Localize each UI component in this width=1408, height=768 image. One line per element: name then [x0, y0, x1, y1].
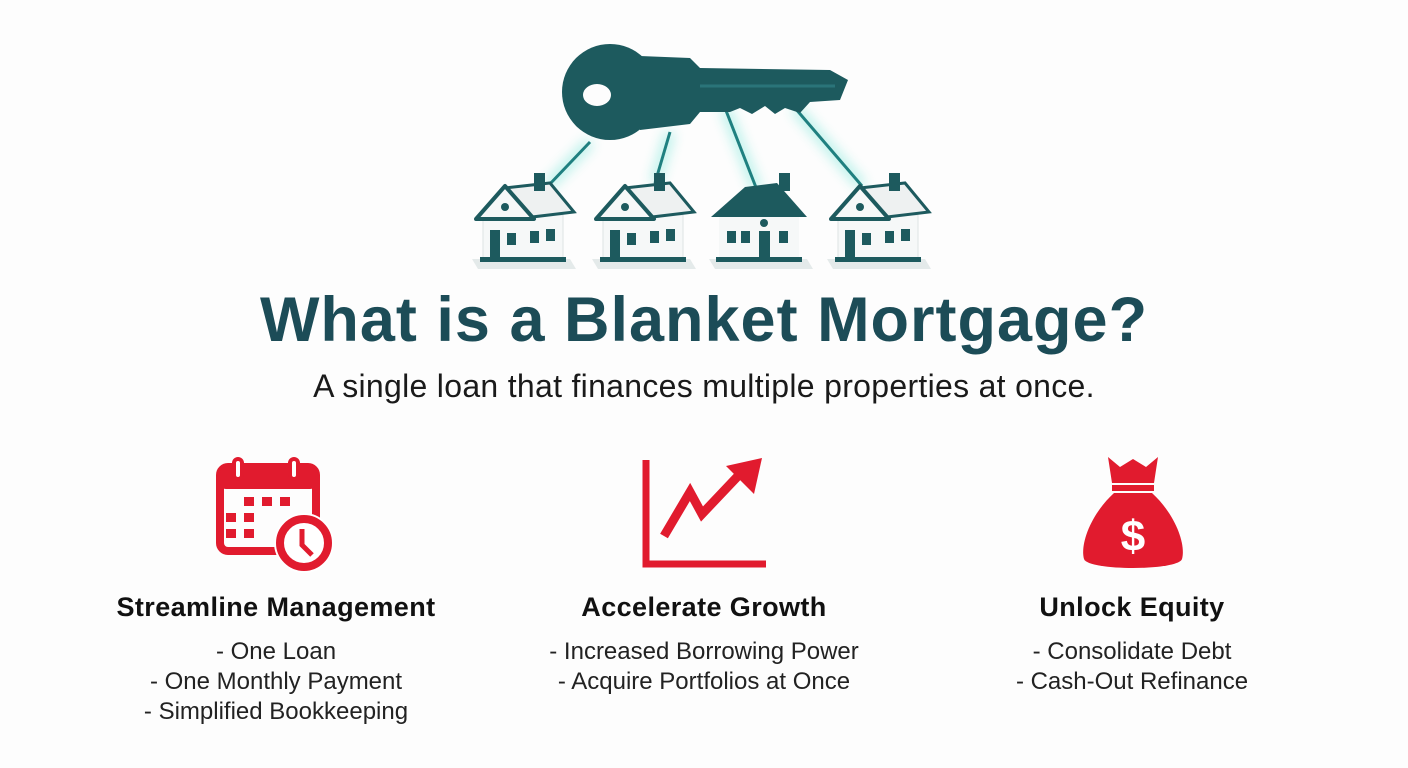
column: streamline management: - One Loan: [216, 638, 336, 665]
column: unlock equity: - Cash-Out Refinance: [1016, 668, 1248, 695]
column: unlock equity: - Consolidate Debt: [1033, 638, 1231, 665]
title: What is a Blanket Mortgage?: [260, 285, 1148, 355]
column: streamline management: [116, 592, 436, 725]
column: accelerate growth: Accelerate Growth: [581, 592, 827, 622]
column: streamline management: - One Monthly Payment: [150, 668, 402, 695]
column: unlock equity: Unlock Equity: [1039, 592, 1225, 622]
column: unlock equity: [1016, 592, 1248, 695]
subtitle: A single loan that finances multiple properties at once.: [313, 368, 1095, 404]
column: accelerate growth: - Acquire Portfolios at Once: [558, 668, 850, 695]
column: streamline management: - Simplified Bookkeeping: [144, 698, 408, 725]
hero illustration: key and houses: [472, 44, 932, 269]
column: accelerate growth: [549, 592, 859, 695]
column: accelerate growth: - Increased Borrowing Power: [549, 638, 859, 665]
icon: growth chart: [642, 458, 766, 568]
icon: calendar with clock: [216, 457, 332, 571]
icon: money bag: $: [1121, 512, 1145, 561]
column: streamline management: Streamline Management: [116, 592, 436, 622]
key: [562, 44, 848, 140]
icon: money bag: [1083, 457, 1183, 568]
glow lines: [548, 108, 862, 190]
